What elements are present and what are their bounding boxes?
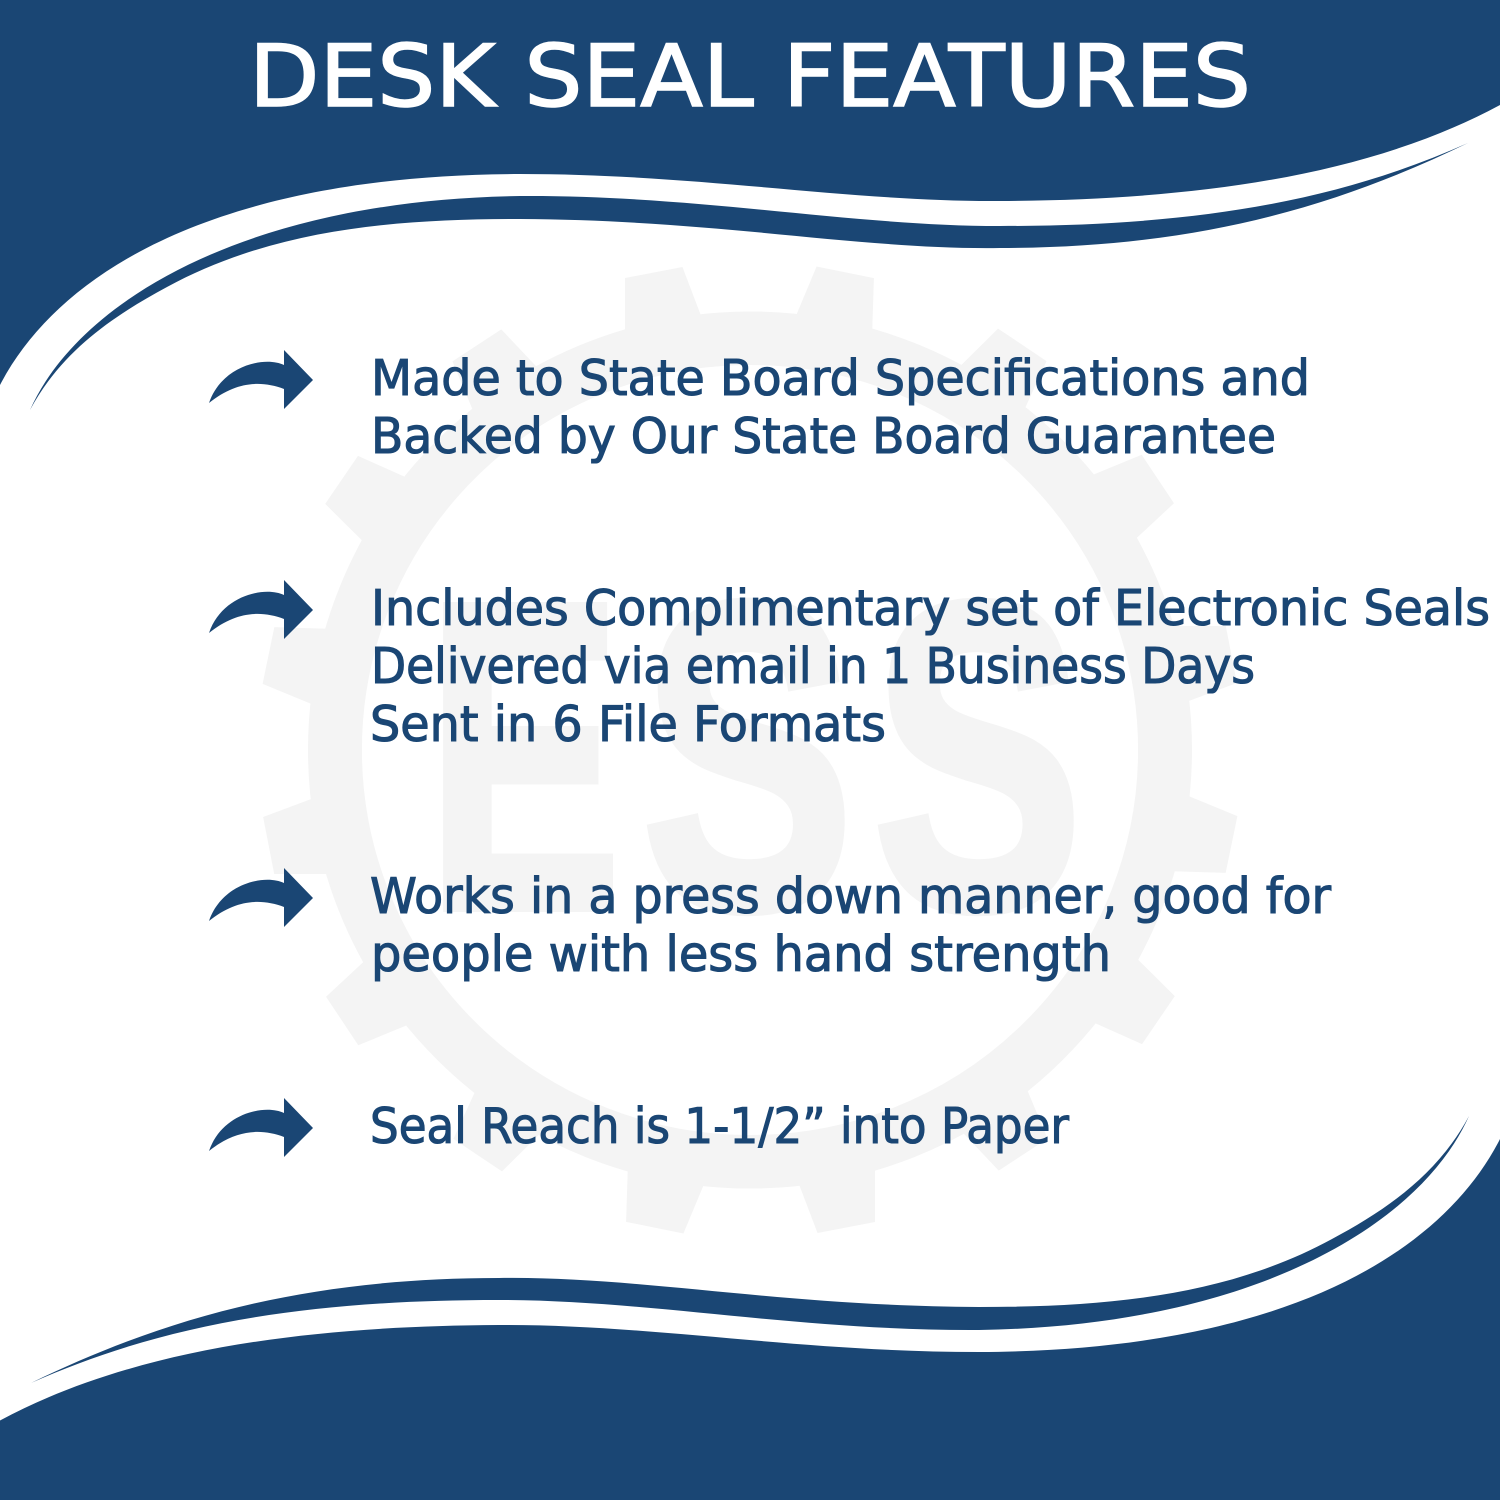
feature 4 — [209, 1098, 1070, 1157]
bottom swoosh — [31, 1116, 1469, 1383]
icon: arrow 2 — [209, 580, 313, 639]
watermark letters ESS: S — [642, 512, 853, 1000]
top swoosh — [30, 143, 1468, 410]
text: feature 1 — [371, 350, 1310, 465]
text: feature 2: Includes Complimentary set of Electronic Seals — [371, 580, 1490, 637]
text: feature 2 — [370, 580, 1490, 753]
watermark: ESS gear logo — [252, 256, 1248, 1244]
text: feature 1: Backed by Our State Board Guarantee — [371, 408, 1276, 465]
top header band — [0, 0, 1500, 385]
text: feature 3: people with less hand strength — [371, 926, 1111, 983]
icon: arrow 4 — [209, 1098, 313, 1157]
feature 2 — [209, 580, 1490, 753]
icon: arrow 3 — [209, 868, 313, 927]
title: DESK SEAL FEATURES — [249, 27, 1251, 127]
watermark letters ESS: E — [427, 513, 621, 1000]
text: feature 2: Delivered via email in 1 Business Days — [371, 638, 1255, 695]
feature 3 — [209, 868, 1332, 983]
watermark letters ESS — [427, 512, 1082, 1000]
text: feature 1: Made to State Board Specifications and — [371, 350, 1310, 407]
gear ring and teeth — [252, 256, 1248, 1244]
watermark letters ESS: S — [873, 512, 1082, 1000]
text: feature 3: Works in a press down manner, good for — [370, 868, 1332, 925]
icon: arrow 1 — [209, 350, 313, 409]
feature 1 — [209, 350, 1310, 465]
text: feature 2: Sent in 6 File Formats — [370, 696, 886, 753]
text: feature 3 — [370, 868, 1332, 983]
text: feature 4: Seal Reach is 1-1/2” into Paper — [370, 1098, 1070, 1155]
bottom footer band — [0, 1135, 1500, 1500]
